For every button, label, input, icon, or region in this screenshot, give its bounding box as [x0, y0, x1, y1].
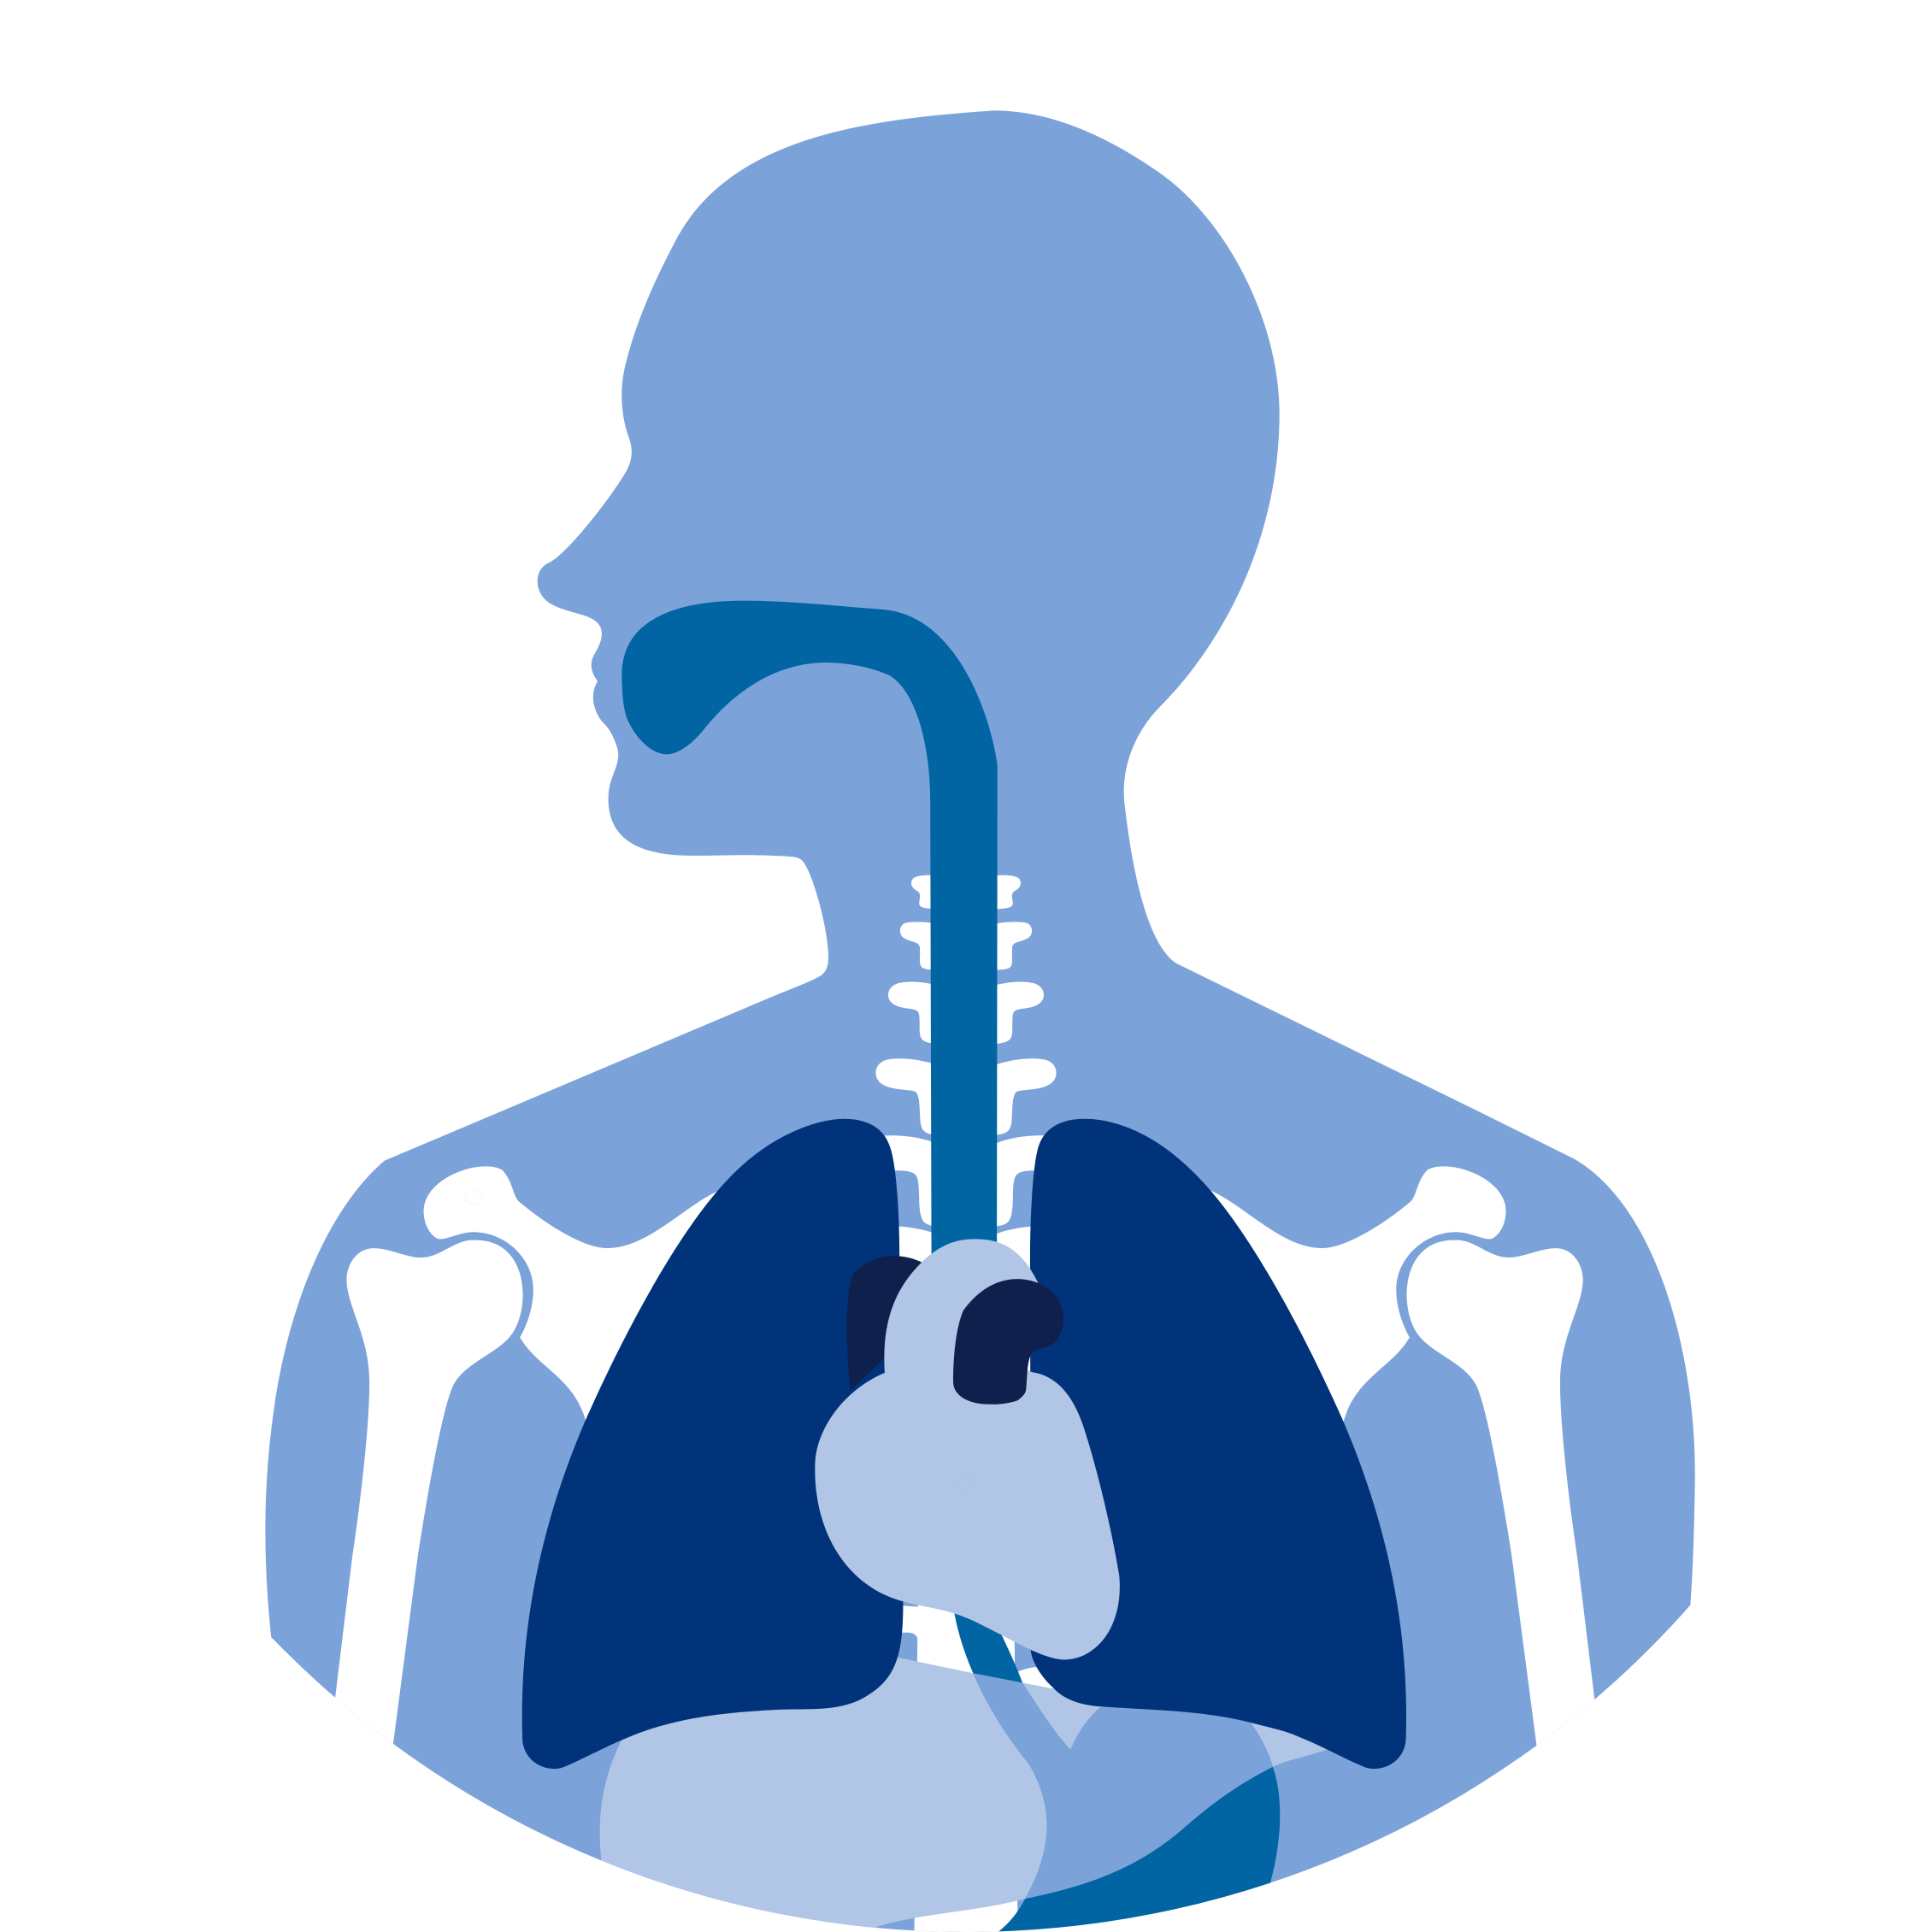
- teal abdominal organ: [949, 1589, 1280, 1932]
- left lung: [522, 1119, 903, 1769]
- body silhouette: [265, 110, 1695, 1932]
- faint heart mark: [957, 1474, 975, 1493]
- spine vertebrae: [875, 875, 1057, 1371]
- infographic: human torso with respiratory system: [265, 110, 1695, 1932]
- right lung: [1030, 1119, 1406, 1769]
- trachea: [621, 601, 998, 1281]
- heart: [815, 1239, 1120, 1659]
- left vertebra halves: [875, 875, 932, 1262]
- figure clipped to circle: [265, 110, 1695, 1932]
- dark vessel behind heart: [847, 1256, 922, 1391]
- left humerus: [335, 1240, 523, 1775]
- right scapula and clavicle: [1210, 1166, 1506, 1422]
- faint scapula mark: [464, 1192, 482, 1204]
- right shoulder bones: [1210, 1166, 1595, 1746]
- lower spine column and ribs: [902, 1605, 1054, 1932]
- left scapula and clavicle: [424, 1166, 717, 1421]
- aortic arch: [953, 1279, 1063, 1405]
- right vertebra halves: [997, 875, 1057, 1371]
- pale abdominal organ: [592, 1658, 1328, 1932]
- organ overlap region: [973, 1673, 1273, 1900]
- right humerus: [1407, 1240, 1594, 1775]
- left shoulder bones: [335, 1166, 717, 1744]
